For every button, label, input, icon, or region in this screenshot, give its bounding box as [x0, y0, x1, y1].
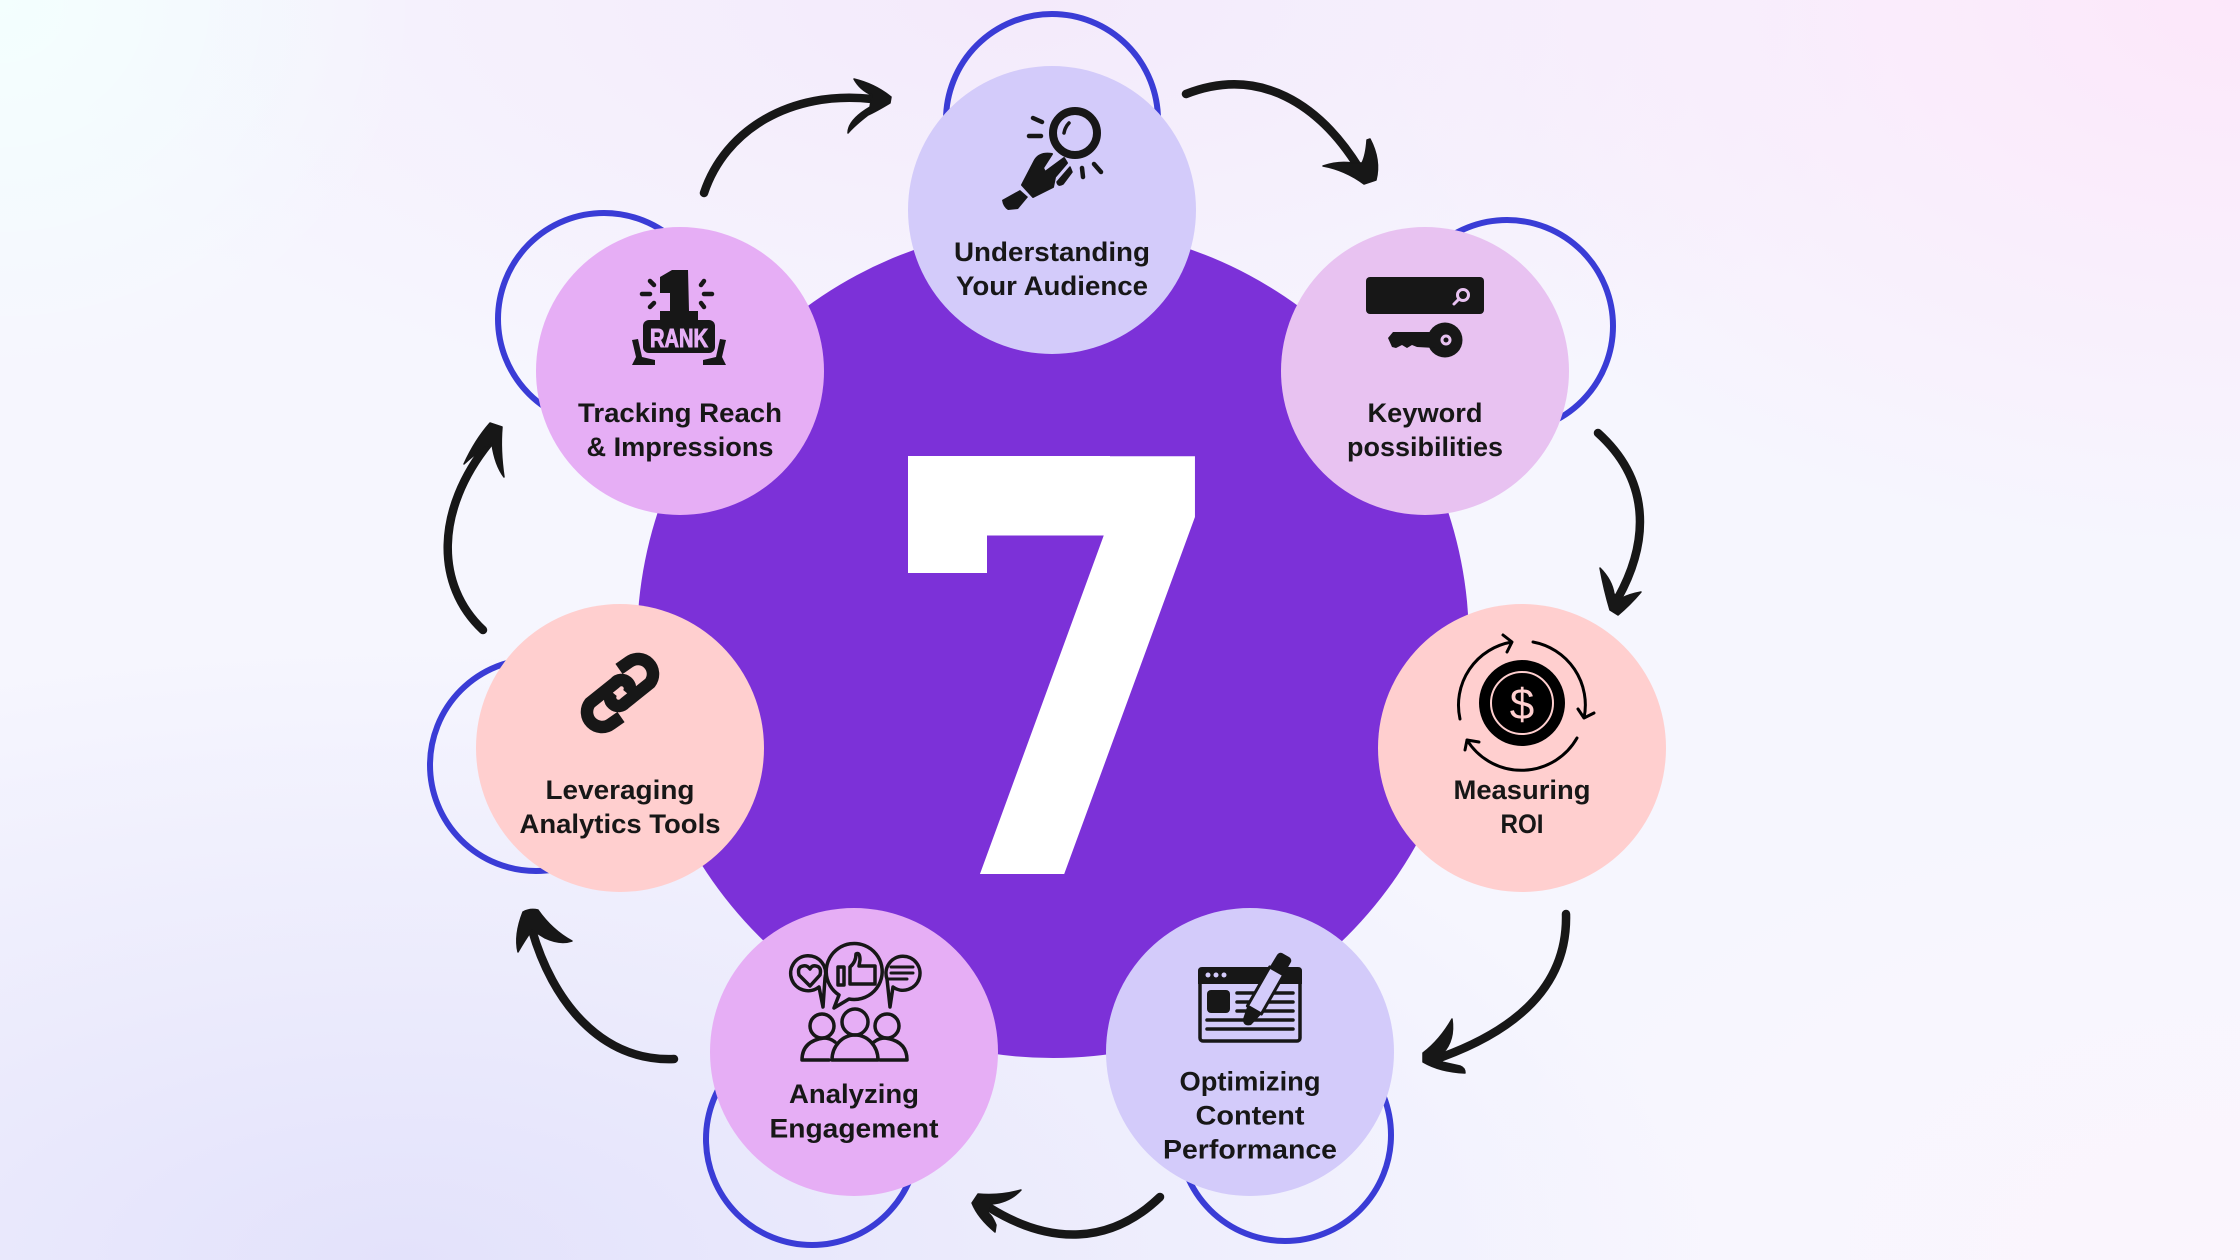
label: Tracking Reach	[578, 398, 782, 428]
label: possibilities	[1347, 432, 1503, 462]
label: Performance	[1163, 1134, 1337, 1164]
label	[770, 1079, 939, 1144]
label	[520, 775, 720, 839]
node: optimizing content performance	[1106, 908, 1394, 1241]
icon: browser window with pencil	[1198, 953, 1302, 1041]
node: leveraging analytics tools	[430, 604, 764, 892]
icon: people with reaction bubbles	[791, 943, 920, 1060]
arrow: keyword to ROI	[1598, 433, 1641, 615]
arrow: analyzing to leveraging	[517, 909, 674, 1059]
circle	[908, 66, 1196, 354]
node: tracking reach and impressions	[498, 213, 824, 515]
arrow: ROI to optimizing	[1423, 914, 1566, 1073]
ring	[1401, 220, 1613, 432]
label: Analytics Tools	[520, 809, 720, 839]
circle	[1281, 227, 1569, 515]
arrow: understanding to keyword	[1186, 84, 1378, 184]
label	[1347, 398, 1503, 462]
node: measuring ROI	[1378, 604, 1666, 892]
label	[1454, 775, 1590, 839]
label: Measuring	[1454, 775, 1590, 805]
central purple circle	[637, 226, 1469, 1058]
label: Leveraging	[546, 775, 694, 805]
node: analyzing engagement	[706, 908, 998, 1245]
label: Analyzing	[789, 1079, 919, 1109]
ring	[498, 213, 710, 425]
node: keyword possibilities	[1281, 220, 1613, 515]
label	[954, 237, 1150, 301]
ring	[1179, 1029, 1391, 1241]
icon: chain link	[587, 659, 653, 727]
label: Engagement	[770, 1114, 939, 1144]
arrow: tracking to understanding	[704, 79, 891, 193]
icon: rank one	[632, 270, 726, 365]
big number 7: 7	[911, 342, 1232, 1010]
label: & Impressions	[586, 432, 774, 462]
node: understanding your audience	[908, 14, 1196, 354]
label	[578, 398, 782, 462]
icon: dollar coin with cycle arrows	[1458, 635, 1594, 770]
icon: hand holding magnifier	[1002, 111, 1101, 210]
arrow: optimizing to analyzing	[972, 1190, 1160, 1235]
ring	[706, 1033, 918, 1245]
circle	[476, 604, 764, 892]
arrow: leveraging to tracking	[448, 423, 504, 630]
ring	[946, 14, 1158, 226]
icon: search bar and key	[1366, 277, 1484, 358]
icon: rank one: RANK	[650, 323, 708, 353]
label: Keyword	[1368, 398, 1482, 428]
icon: dollar coin with cycle arrows: $	[1510, 680, 1534, 729]
circle	[536, 227, 824, 515]
label: Optimizing	[1180, 1066, 1320, 1096]
circle	[1378, 604, 1666, 892]
label: Your Audience	[956, 271, 1148, 301]
circle	[1106, 908, 1394, 1196]
label	[1163, 1066, 1337, 1164]
label: ROI	[1500, 809, 1544, 839]
label: Understanding	[954, 237, 1150, 267]
label: Content	[1196, 1100, 1304, 1130]
circle	[710, 908, 998, 1196]
ring	[430, 659, 642, 871]
